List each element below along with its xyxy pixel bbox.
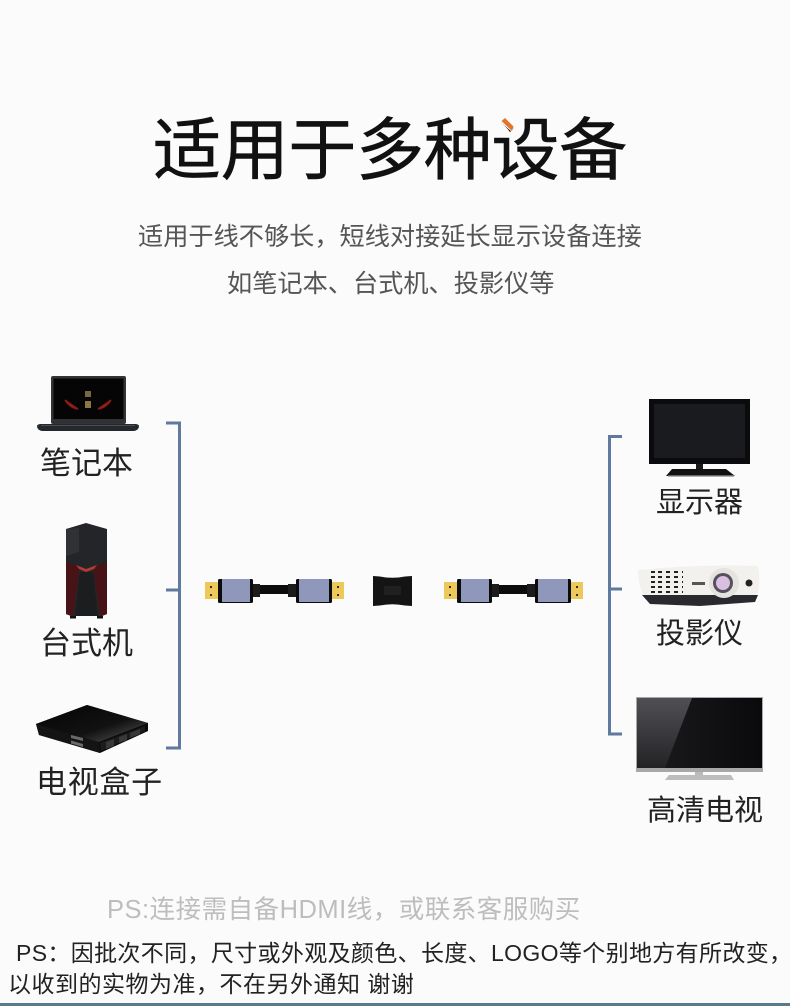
plug tip right: [332, 582, 344, 599]
label: desktop: 台式机: [40, 626, 133, 661]
bottom band: [0, 1003, 790, 1006]
label: flat tv: 高清电视: [647, 795, 763, 827]
note: disclaimer: [8, 940, 790, 997]
title orange accent: [499, 117, 514, 131]
plug tip left: [444, 582, 458, 599]
icon: monitor: [649, 399, 750, 476]
icon: flat tv: [636, 697, 763, 780]
plug tip right: [571, 582, 583, 599]
subtitle text: 适用于线不够长，短线对接延长显示设备连接: [138, 223, 642, 251]
plug tip left: [205, 582, 219, 599]
note: disclaimer: 以收到的实物为准，不在另外通知 谢谢: [8, 971, 414, 997]
note: gray connection note: PS:连接需自备HDMI线，或联系客服购买: [107, 896, 581, 924]
hdmi cable left: [205, 579, 344, 603]
hdmi cable right: [444, 579, 583, 603]
label: monitor: 显示器: [656, 487, 743, 519]
label: laptop: 笔记本: [40, 446, 133, 481]
label: projector: 投影仪: [656, 618, 743, 650]
icon: projector: [638, 566, 759, 606]
left bracket: [166, 422, 181, 750]
title: 适用于多种设备: [153, 113, 627, 189]
note: disclaimer: PS：因批次不同，尺寸或外观及颜色、长度、LOGO等个别地方有所改变，: [16, 940, 790, 966]
label: tv box: 电视盒子: [36, 765, 163, 800]
icon: tv box: [36, 705, 148, 753]
subtitle text: [138, 223, 642, 298]
hdmi coupler: [373, 576, 412, 606]
right bracket: [608, 435, 622, 736]
subtitle text: 如笔记本、台式机、投影仪等: [227, 270, 554, 298]
icon: desktop tower: [66, 523, 107, 618]
icon: laptop: [37, 376, 139, 431]
